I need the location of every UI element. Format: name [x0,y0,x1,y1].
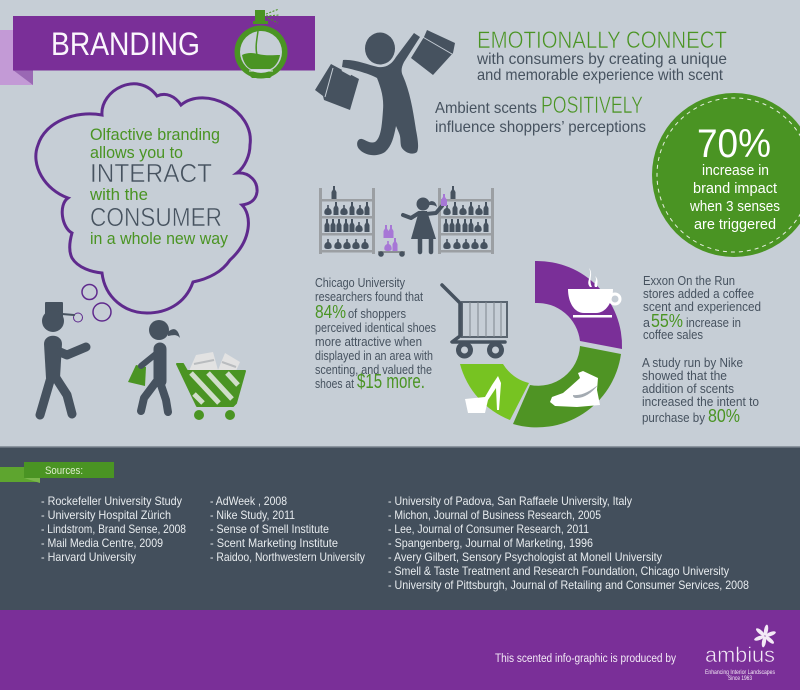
logo: ambius: ambius [705,644,775,667]
sources column 2: - Nike Study, 2011 [210,508,295,522]
sources column 3: - University of Padova, San Raffaele University, Italy [388,494,632,508]
icon: perfume bottle [234,9,288,78]
icon: woman shopper with bag [128,320,180,412]
text: Exxon and Nike studies: stores added a coffee [643,287,754,301]
icon: trolley with purple bottles [378,225,405,257]
icon: grey shopping cart [442,285,507,356]
sources column 3: - Avery Gilbert, Sensory Psychologist at Monell University [388,550,662,564]
heading: ambient scents: Ambient scents [435,100,537,117]
text: Exxon and Nike studies: Exxon On the Run [643,274,735,288]
sources column 1: - Lindstrom, Brand Sense, 2008 [41,522,186,536]
heading: emotionally connect [476,27,727,84]
text: Exxon and Nike studies: increased the intent to [642,395,759,409]
sources column 2: - Sense of Smell Institute [210,522,329,536]
thought cloud [36,84,257,313]
sources tag: Sources: [45,465,83,477]
sources column 1: - Harvard University [41,550,136,564]
sources column 1: - University Hospital Zürich [41,508,171,522]
text: Exxon and Nike studies: addition of scents [642,382,734,396]
icon: man with pipe [40,302,86,415]
callout: 70 percent [652,93,800,257]
text: Exxon and Nike studies: coffee sales [643,328,703,342]
callout: 70 percent: are triggered [694,216,776,233]
sources column 3: - Michon, Journal of Business Research, 2005 [388,508,601,522]
text: Exxon and Nike studies: scent and experienced [643,300,761,314]
sources column 2: - AdWeek , 2008 [210,494,287,508]
cloud text: with the [89,186,148,204]
heading: ambient scents [435,92,646,136]
icon: green shopping cart [177,352,245,420]
right bag [411,30,455,75]
cloud text [89,126,229,248]
figure [342,32,420,155]
text: Exxon and Nike studies: showed that the [642,369,727,383]
sources column 3 [388,494,749,592]
sources column 3: - Lee, Journal of Consumer Research, 2011 [388,522,589,536]
text: Exxon and Nike studies: 55% [651,311,683,331]
title banner [0,16,315,85]
text: Chicago University study: shoes at [315,377,354,391]
text: Chicago University study: scenting, and valued the [315,363,432,377]
icon: high heel [465,376,501,413]
heading: emotionally connect: EMOTIONALLY CONNECT [477,27,727,54]
text: Exxon and Nike studies: 80% [708,406,740,426]
icon: girl stocking shelf [403,194,447,252]
heading: branding: BRANDING [51,26,200,62]
sources tag [0,462,114,483]
heading: ambient scents: POSITIVELY [541,92,643,119]
sources column 1 [41,494,186,564]
icon: sneaker [550,371,600,407]
cloud text: INTERACT [90,158,212,188]
text: Chicago University study: perceived identical shoes [315,321,436,335]
icon: coffee cup [568,268,620,318]
donut chart [460,261,622,427]
footer [0,610,800,690]
sources column 1: - Mail Media Centre, 2009 [41,536,163,550]
sources column 3: - Smell & Taste Treatment and Research Foundation, Chicago University [388,564,729,578]
sources column 2: - Raidoo, Northwestern University [210,550,365,564]
cloud text: allows you to [90,144,183,162]
text: Exxon and Nike studies: a [643,316,650,330]
logo: ambius: Since 1963 [728,676,753,682]
text: Chicago University study: researchers found that [315,290,423,304]
sources column 2: - Scent Marketing Institute [210,536,338,550]
logo: ambius [705,624,776,682]
thought bubbles [74,284,111,322]
text: Exxon and Nike studies: increase in [686,316,741,330]
cloud text: in a whole new way [90,230,229,248]
callout: 70 percent: brand impact [693,180,778,197]
left bag [315,64,359,110]
text: Chicago University study: more attractive when [315,335,422,349]
segment: high heel [460,364,529,420]
panel: sources [0,446,800,610]
sources column 3: - University of Pittsburgh, Journal of Retailing and Consumer Services, 2008 [388,578,749,592]
icon: right shelf with bottles [438,186,494,254]
segment: sneaker [513,346,621,427]
sources column 3: - Spangenberg, Journal of Marketing, 1996 [388,536,593,550]
text: Chicago University study [315,276,436,393]
heading: emotionally connect: with consumers by creating a unique [476,51,727,68]
callout: 70 percent: 70% [697,122,771,166]
footer: This scented info-graphic is produced by [495,653,676,665]
text: Exxon and Nike studies [642,274,761,426]
segment: coffee [535,261,622,349]
text: Exxon and Nike studies: A study run by Nike [642,356,743,370]
sources column 1: - Rockefeller University Study [41,494,182,508]
text: Exxon and Nike studies: purchase by [642,411,706,425]
cloud text: Olfactive branding [90,126,220,144]
sources column 2 [210,494,365,564]
logo: ambius: Enhancing Interior Landscapes [705,670,775,676]
text: Chicago University study: 84% [315,302,346,322]
heading: emotionally connect: and memorable experience with scent [477,67,723,84]
icon: jumping shopper with bags [315,30,455,155]
cloud text: CONSUMER [90,202,222,232]
text: Chicago University study: Chicago University [315,276,406,290]
icon: left shelf with bottles [319,186,375,254]
text: Chicago University study: displayed in an area with [315,349,433,363]
text: Chicago University study: of shoppers [348,307,406,321]
callout: 70 percent: when 3 senses [689,198,780,215]
text: Chicago University study: $15 more. [357,371,425,393]
heading: ambient scents: influence shoppers’ perceptions [435,119,646,136]
callout: 70 percent: increase in [702,162,769,179]
